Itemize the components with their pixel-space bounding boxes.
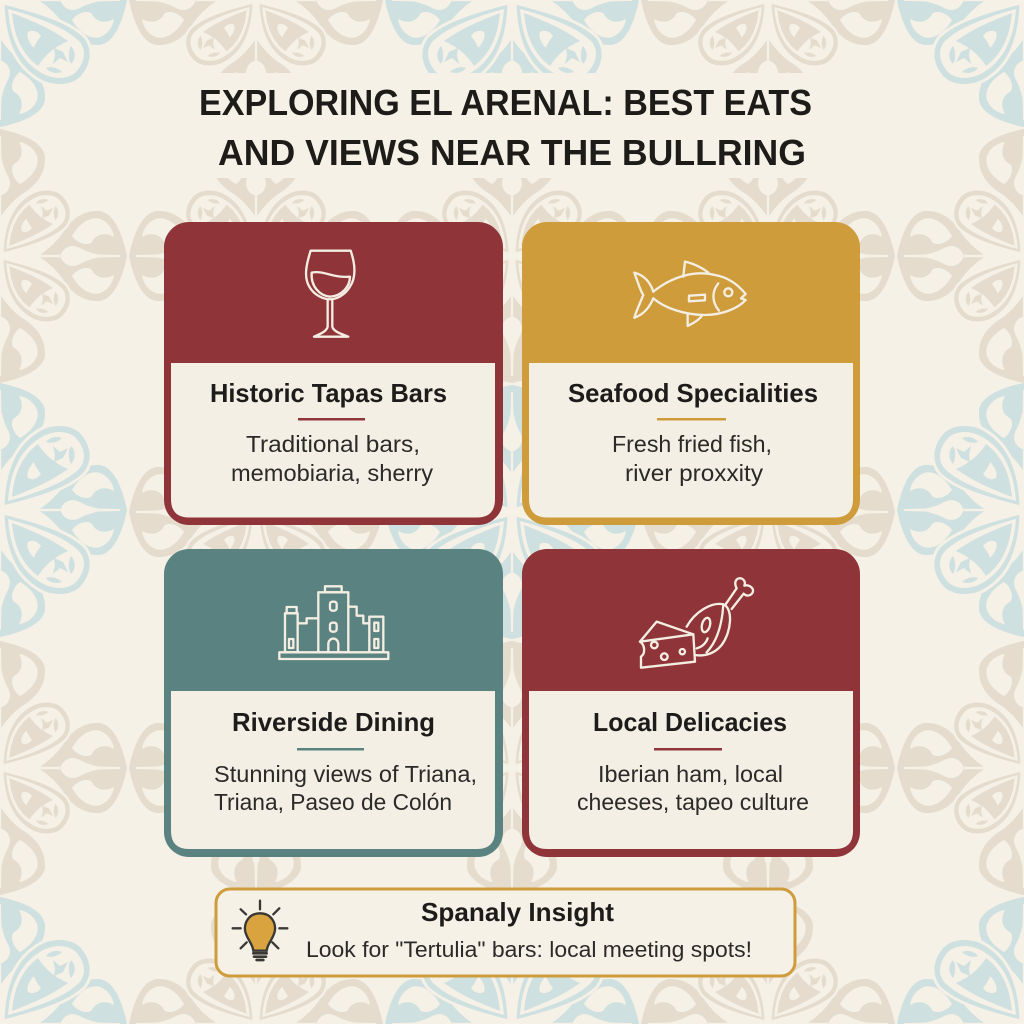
text: historic tapas bars description bbox=[231, 431, 433, 486]
text: riverside description bbox=[214, 761, 477, 815]
heading: historic tapas bars: Historic Tapas Bars bbox=[210, 378, 447, 408]
text: riverside description: Triana, Paseo de Colón bbox=[214, 789, 452, 815]
panel: local delicacies bbox=[522, 549, 860, 857]
text: seafood description bbox=[612, 431, 772, 486]
title: EXPLORING EL ARENAL: BEST EATS bbox=[199, 82, 812, 123]
text: local delicacies description: Iberian ham, local bbox=[598, 761, 783, 787]
text: riverside description: Stunning views of Triana, bbox=[214, 761, 477, 787]
text: seafood description: river proxxity bbox=[625, 460, 763, 486]
icon: fish bbox=[634, 262, 746, 326]
text: historic tapas bars description: memobiaria, sherry bbox=[231, 460, 433, 486]
panel: historic tapas bars bbox=[164, 222, 503, 525]
heading: seafood specialities: Seafood Specialities bbox=[568, 378, 818, 408]
text: seafood description: Fresh fried fish, bbox=[612, 431, 772, 457]
title bbox=[199, 82, 812, 173]
text: historic tapas bars description: Traditional bars, bbox=[246, 431, 420, 457]
heading: local delicacies: Local Delicacies bbox=[593, 707, 787, 737]
icon: riverside castle bbox=[279, 586, 388, 659]
icon: light bulb bbox=[233, 901, 287, 960]
text: local delicacies description bbox=[577, 761, 809, 815]
panel: riverside dining bbox=[164, 549, 503, 857]
icon: cheese and ham bbox=[640, 578, 753, 668]
text: local delicacies description: cheeses, tapeo culture bbox=[577, 789, 809, 815]
callout: spanaly insight bbox=[216, 889, 795, 976]
callout text: Look for "Tertulia" bars: local meeting spots! bbox=[306, 937, 752, 962]
icon: wine glass bbox=[306, 251, 354, 337]
heading: riverside dining: Riverside Dining bbox=[232, 707, 435, 737]
title: AND VIEWS NEAR THE BULLRING bbox=[218, 132, 806, 173]
panel: seafood specialities bbox=[522, 222, 860, 525]
callout heading: Spanaly Insight bbox=[421, 897, 614, 927]
